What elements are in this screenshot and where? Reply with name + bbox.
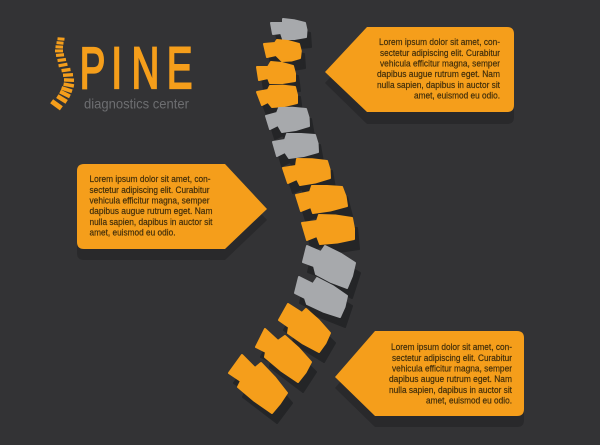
vertebra 3 (257, 62, 295, 83)
vertebra 12 (279, 304, 330, 352)
text block: vehicula efficitur magna, semper (90, 194, 210, 206)
text block: dapibus augue rutrum eget. Nam (389, 373, 512, 384)
text block: dapibus augue rutrum eget. Nam (90, 205, 213, 216)
vertebra 8 (296, 186, 347, 213)
text block (90, 173, 213, 238)
text block: sectetur adipiscing elit. Curabitur (392, 352, 512, 363)
text block: Lorem ipsum dolor sit amet, con- (90, 173, 210, 184)
logo: spine diagnostics center (50, 37, 192, 111)
vertebra 14 (229, 355, 287, 413)
vertebra 5 (266, 108, 309, 132)
text block: nulla sapien, dapibus in auctor sit (389, 384, 512, 395)
heading: PINE: PINE (80, 37, 192, 101)
spine shadows (234, 29, 360, 423)
text block: vehicula efficitur magna, semper (392, 362, 512, 374)
text block: sectetur adipiscing elit. Curabitur (90, 184, 210, 195)
text block: Lorem ipsum dolor sit amet, con- (391, 341, 512, 352)
text block: amet, euismod eu odio. (90, 227, 176, 238)
text block (389, 341, 512, 406)
vertebra 2 (264, 40, 301, 61)
text block: sectetur adipiscing elit. Curabitur (380, 47, 500, 58)
vertebra 9 (302, 215, 354, 244)
vertebra 1 (271, 19, 306, 39)
text block (377, 36, 500, 101)
panel: middle left callout (77, 164, 267, 249)
panel: bottom right callout (335, 331, 524, 416)
text block: nulla sapien, dapibus in auctor sit (377, 79, 500, 90)
text block: nulla sapien, dapibus in auctor sit (90, 216, 213, 227)
icon: small spine (50, 37, 74, 110)
chart: spine vertebrae (229, 19, 355, 413)
subtitle: diagnostics center (84, 96, 189, 112)
vertebra 10 (303, 246, 355, 288)
text block: Lorem ipsum dolor sit amet, con- (379, 36, 500, 47)
text block: amet, euismod eu odio. (414, 90, 500, 101)
vertebra 11 (295, 277, 347, 317)
text block: amet, euismod eu odio. (426, 395, 512, 406)
vertebra 7 (283, 159, 330, 185)
panel shadows (77, 38, 524, 427)
vertebra 6 (273, 134, 318, 158)
vertebra 4 (257, 86, 297, 107)
panel: top right callout (325, 27, 514, 112)
text block: dapibus augue rutrum eget. Nam (377, 68, 500, 79)
text block: vehicula efficitur magna, semper (380, 58, 500, 68)
vertebra 13 (256, 329, 311, 382)
